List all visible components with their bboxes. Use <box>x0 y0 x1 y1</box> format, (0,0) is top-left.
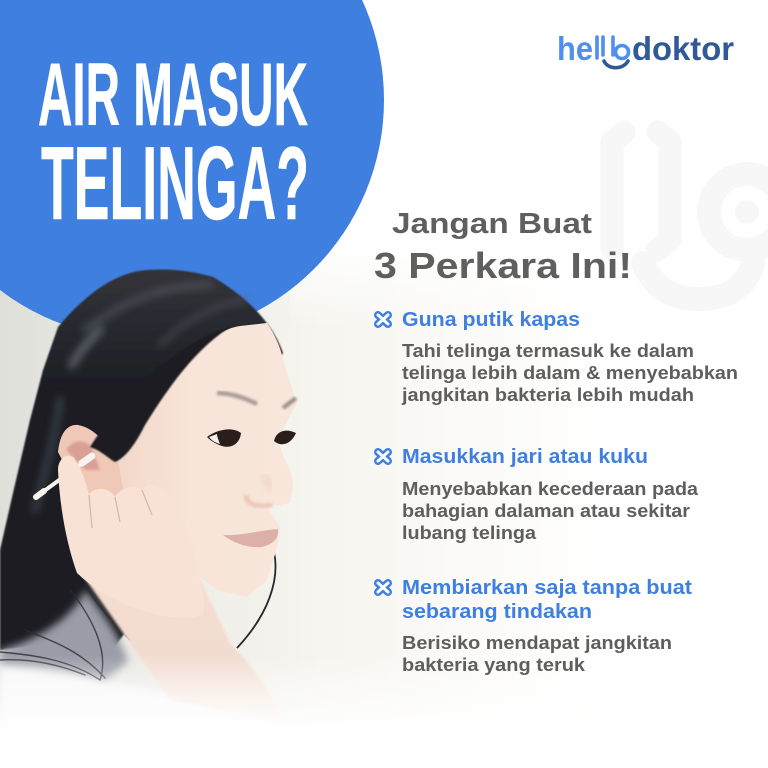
left eye <box>207 429 241 447</box>
hair above ear <box>90 327 230 462</box>
nose shadow <box>246 495 272 506</box>
lips <box>223 529 278 547</box>
item 2: Masukkan jari atau kuku <box>402 445 648 468</box>
icon: cross <box>378 315 388 324</box>
ear <box>58 425 125 505</box>
blue circle <box>0 0 384 339</box>
right eyebrow <box>283 398 296 408</box>
item 3: sebarang tindakan <box>402 600 592 623</box>
stray hair strand <box>237 552 275 648</box>
logo: hellodoktor: he <box>557 30 593 67</box>
left eyebrow <box>217 393 257 404</box>
subtitle: Jangan Buat <box>392 208 592 240</box>
sweater <box>0 665 320 768</box>
icon: cross <box>378 583 388 592</box>
hair end strands <box>0 585 130 680</box>
logo: hellodoktor <box>557 30 734 68</box>
subtitle <box>374 208 632 286</box>
item 2 <box>378 445 699 543</box>
subtitle: 3 Perkara Ini! <box>374 245 632 286</box>
logo: hellodoktor: doktor <box>632 30 734 67</box>
item 1: Tahi telinga termasuk ke dalam <box>402 340 694 361</box>
title <box>38 44 309 242</box>
item 1: jangkitan bakteria lebih mudah <box>401 384 694 405</box>
icon: cross <box>378 452 388 461</box>
item 3: bakteria yang teruk <box>402 654 586 675</box>
hair sheen <box>35 285 245 510</box>
photo background <box>0 240 768 768</box>
hair ends <box>0 590 128 680</box>
item 1: Guna putik kapas <box>402 308 580 331</box>
watermark logo <box>612 132 768 299</box>
finger lines <box>89 490 152 528</box>
title: AIR MASUK <box>38 44 308 144</box>
bottom fade <box>0 655 768 735</box>
item 3 <box>378 576 692 675</box>
face <box>100 323 297 597</box>
item 1: telinga lebih dalam & menyebabkan <box>402 362 738 383</box>
title: TELINGA? <box>41 126 309 242</box>
hand <box>58 456 204 618</box>
right eye <box>274 431 296 444</box>
arm <box>77 567 282 722</box>
cotton swab <box>36 456 92 497</box>
item 2: Menyebabkan kecederaan pada <box>402 478 699 499</box>
item 3: Membiarkan saja tanpa buat <box>402 576 692 599</box>
item 2: bahagian dalaman atau sekitar <box>402 500 690 521</box>
girl photo illustration <box>0 269 320 768</box>
item 2: lubang telinga <box>402 522 537 543</box>
item 1 <box>378 308 738 405</box>
item 3: Berisiko mendapat jangkitan <box>402 632 672 653</box>
hair mass <box>0 269 283 650</box>
